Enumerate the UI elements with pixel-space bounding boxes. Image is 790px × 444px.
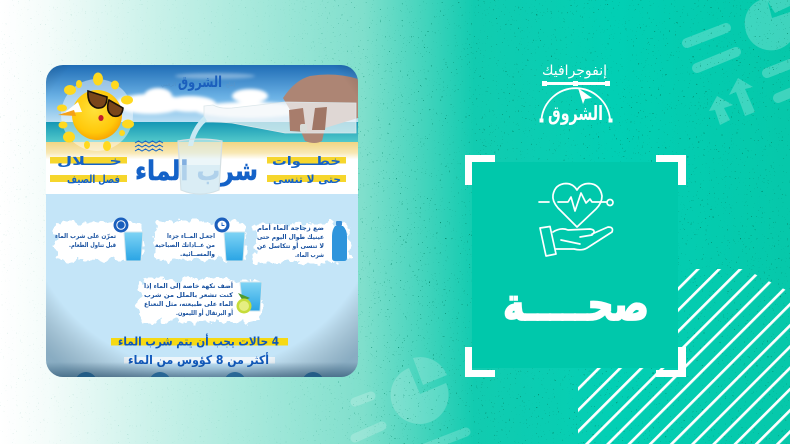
vector curve handle [540, 81, 612, 122]
decoration: top right chart icons [687, 0, 790, 125]
tip 4: paint splash: أضف نكهة خاصة إلى الماء إذا [144, 281, 233, 290]
tip 4: paint splash: أو البرتقال أو الليمون. [176, 308, 233, 317]
right heading: steps not to forget: خطـــوات [272, 154, 341, 169]
icon: water bottle [332, 221, 347, 261]
icon: glass with lime [236, 282, 262, 314]
heading: 4 cases: 4 حالات يجب أن يتم شرب الماء [118, 334, 279, 348]
icon: heart on hand [539, 184, 613, 256]
hand [283, 75, 358, 143]
right heading: steps not to forget [267, 156, 346, 184]
publisher logo: إنتاج [226, 82, 236, 88]
tip 3: paint splash: عينيك طوال اليوم حتى [257, 234, 324, 241]
lower pale blue section [46, 194, 358, 377]
icon: glass [224, 232, 245, 261]
water stream [188, 116, 207, 146]
tip 1: paint splash: قبل تناول الطعام. [69, 242, 116, 249]
publisher logo: الشروق [178, 73, 222, 91]
icon: glass [124, 232, 143, 261]
tip 4: paint splash: كنت تشعر بالملل من شرب [144, 292, 233, 299]
icon: sun with sunglasses [57, 72, 134, 151]
decoration: diagonal stripes [578, 269, 790, 444]
corner brackets [465, 155, 686, 377]
wave icon [135, 141, 163, 151]
tip 3: paint splash [255, 221, 350, 262]
next section icons [77, 372, 322, 377]
beach and white band [46, 142, 358, 196]
card edge shading [46, 362, 358, 377]
sky [46, 65, 358, 125]
tip 1: paint splash: تمرّن على شرب الماء [55, 233, 116, 240]
tip 3: paint splash: شرب الماء. [295, 252, 324, 259]
heading: health: صحـــــة [503, 277, 649, 331]
heading: drink water: شرب الماء [135, 156, 258, 187]
bottle and hand [188, 75, 358, 146]
panel: health category [465, 155, 686, 377]
brand logo: الشروق [548, 101, 603, 125]
tip 2: paint splash: اجعـل المــاء جزءا [167, 233, 215, 240]
brand logo: إنفوجرافيك [542, 63, 607, 79]
tip 4: paint splash [139, 280, 262, 322]
bottle [204, 102, 356, 133]
left heading: during summer [50, 154, 127, 186]
tip 2: paint splash: والمســائية. [180, 251, 215, 258]
tip 2: paint splash [154, 218, 245, 261]
publisher logo: الرقمي [161, 82, 176, 88]
icon: plate and cutlery [114, 218, 128, 232]
left heading: during summer: فصل الصيف [67, 173, 120, 186]
publisher logo [162, 76, 234, 91]
panel: infographic preview card [46, 65, 358, 394]
icon: cursor arrow [578, 88, 592, 104]
decoration: bottom left chart icons [355, 357, 466, 444]
tip 3: paint splash: لا تنسى أو تتكاسل عن [257, 241, 324, 250]
tip 3: paint splash: ضع زجاجة الماء أمام [257, 223, 324, 232]
right heading: steps not to forget: حتى لا تنسى [273, 173, 341, 186]
tip 2: paint splash: من عــاداتك الصباحية [155, 242, 215, 249]
left heading: during summer: خــــلال [57, 154, 122, 168]
icon: clock [214, 218, 230, 232]
brand logo [540, 63, 612, 125]
clouds [116, 73, 305, 118]
heading: more than 8 glasses: أكثر من 8 كؤوس من الماء [128, 352, 269, 368]
icon: glass of water [178, 139, 222, 194]
tip 1: paint splash [55, 218, 143, 261]
sea [46, 122, 358, 142]
tip 4: paint splash: الماء على طبيعته، مثل النعناع [144, 301, 233, 308]
